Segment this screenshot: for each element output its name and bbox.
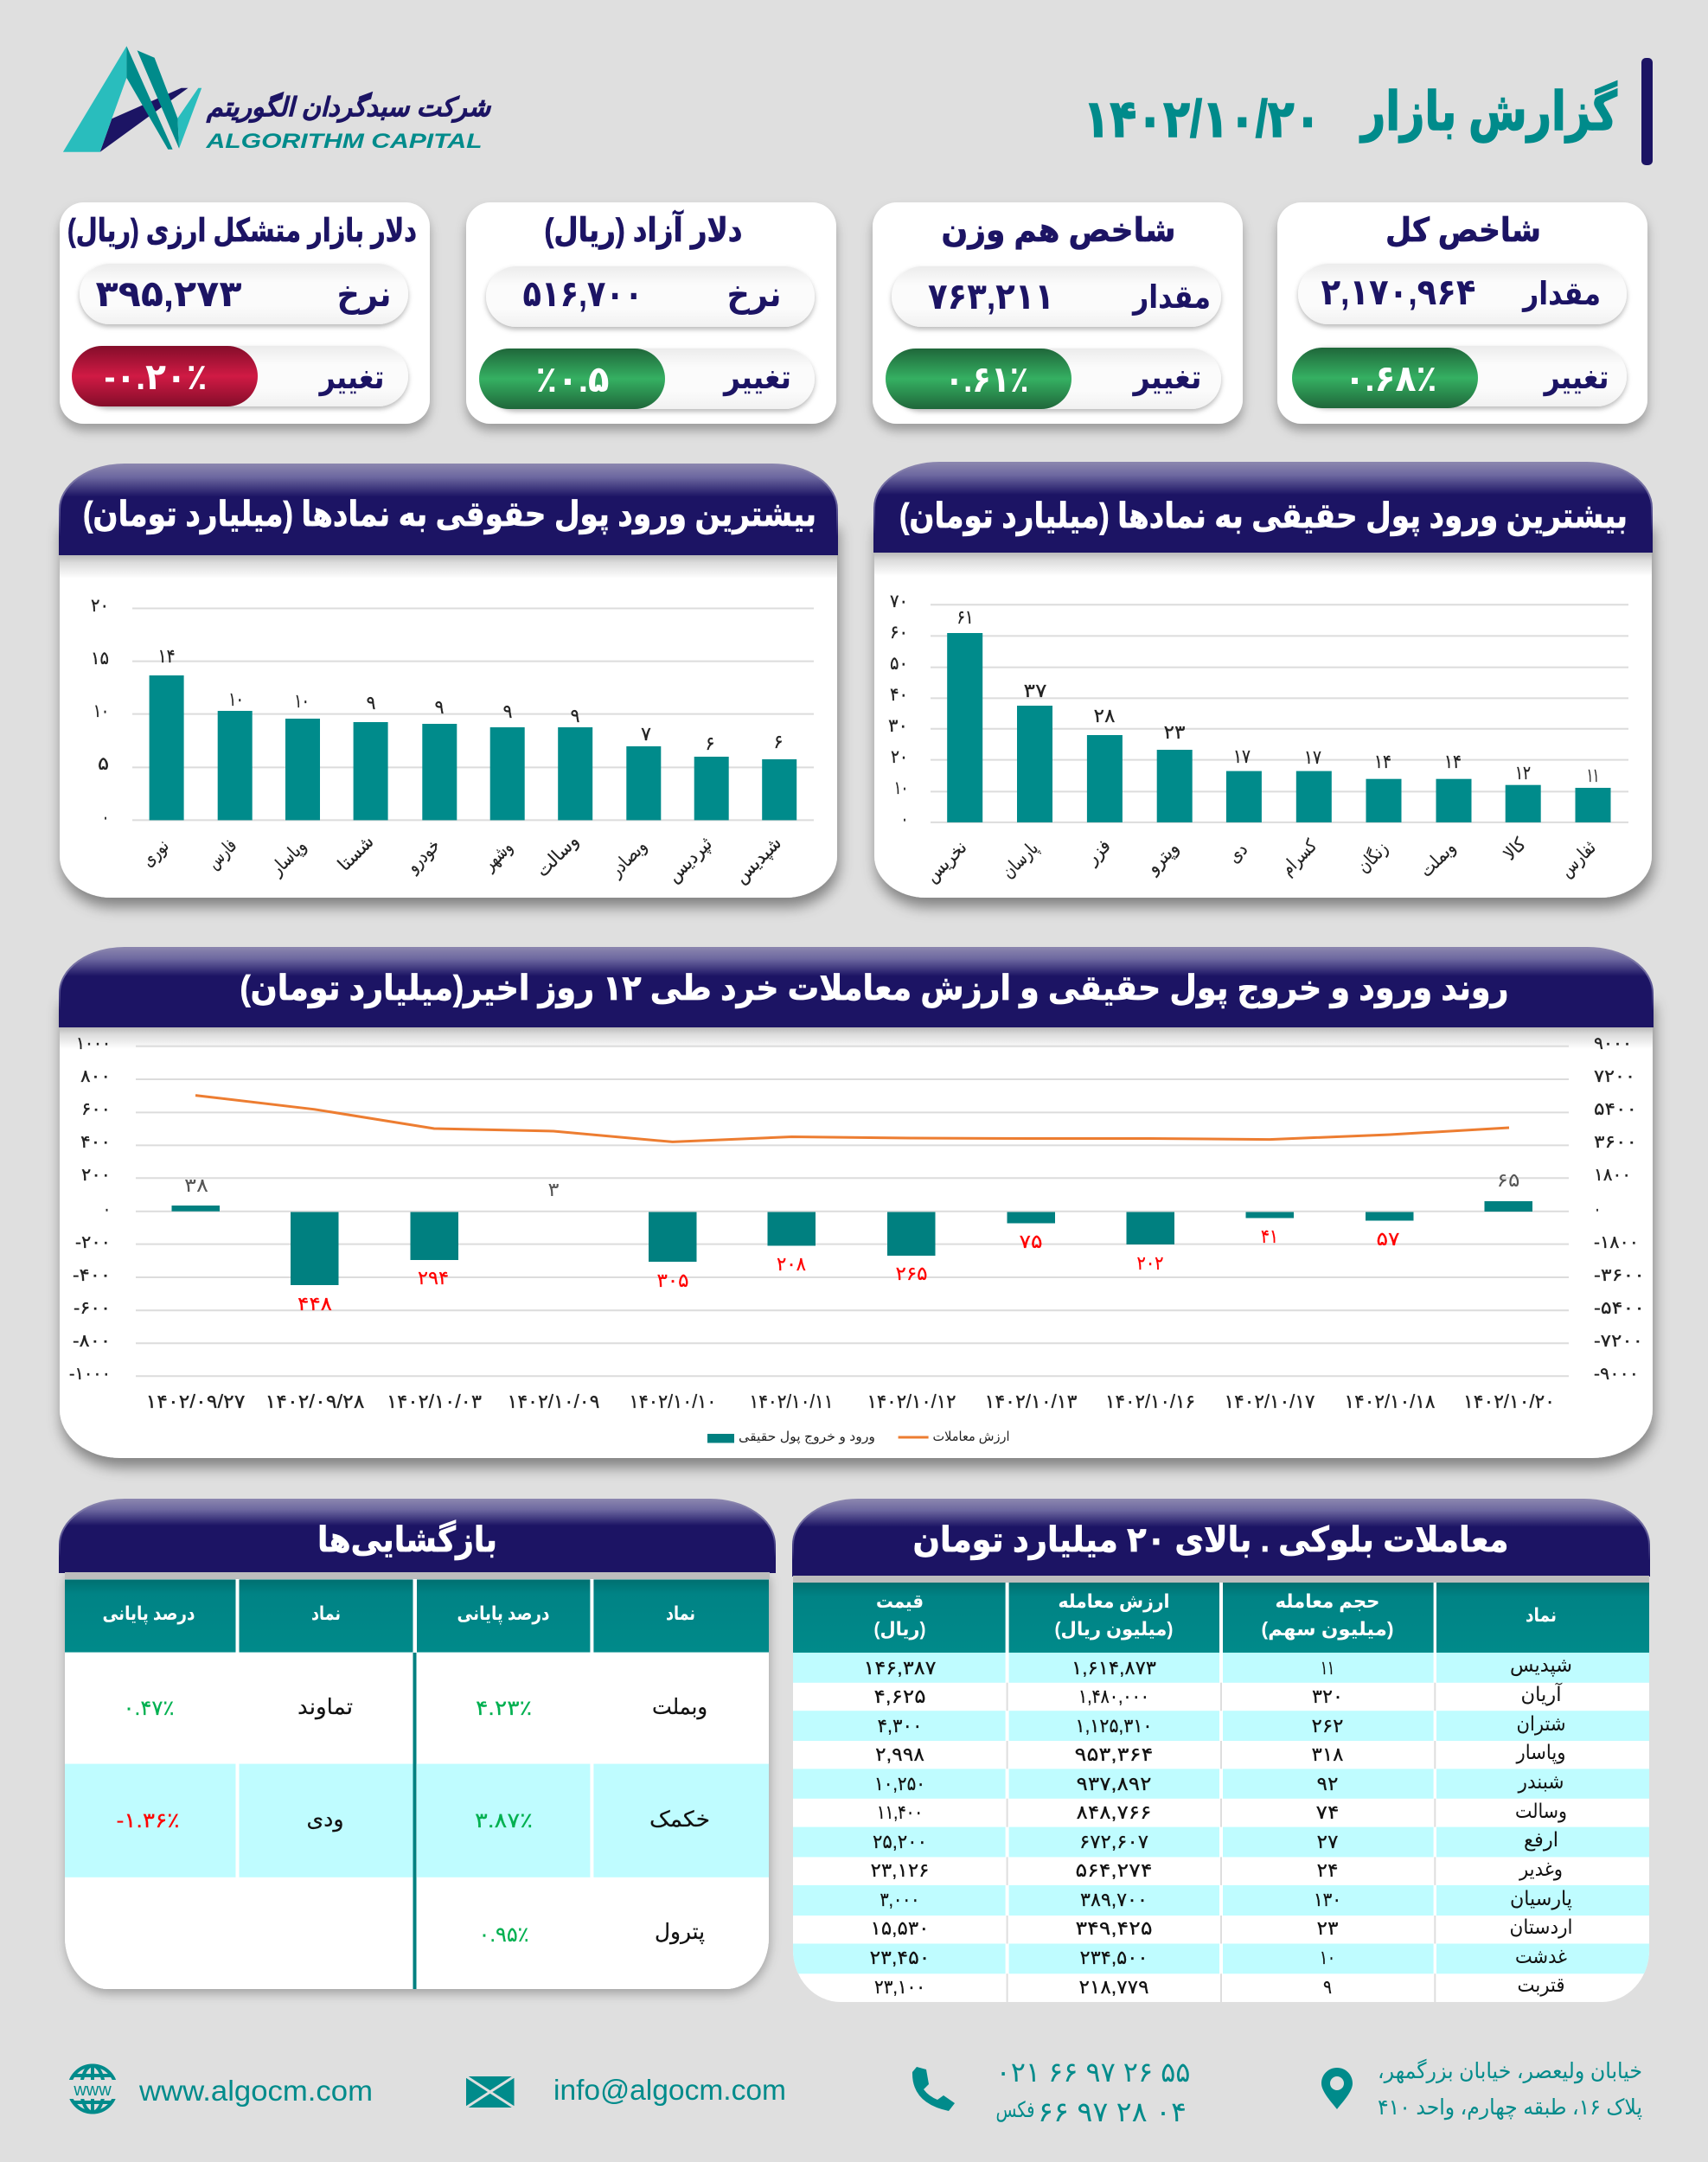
y axis labels: ۳۰	[888, 716, 908, 736]
value labels: ۱۰	[228, 688, 244, 710]
value labels: ۹	[503, 700, 512, 722]
panel: block trades table	[793, 1500, 1649, 2002]
legend: ارزش معاملات	[932, 1430, 1010, 1444]
date axis: ۱۴۰۲/۱۰/۱۱	[749, 1391, 834, 1412]
panel: equal-weight index card	[873, 202, 1243, 424]
rate pill	[80, 264, 408, 324]
value labels: ۶	[706, 732, 714, 754]
y axis labels: ۵	[98, 754, 109, 774]
date axis: ۱۴۰۲/۱۰/۱۷	[1225, 1391, 1315, 1412]
address text: خیابان ولیعصر، خیابان بزرگمهر،	[1378, 2058, 1642, 2084]
value labels: ۹	[571, 705, 579, 726]
panel header	[874, 463, 1652, 552]
flow value labels: ۴۴۸	[297, 1293, 332, 1314]
value labels: ۱۷	[1304, 746, 1321, 768]
flow value labels: ۵۷	[1377, 1228, 1400, 1250]
company name Persian: شرکت سبدگردان الگوریتم	[206, 92, 492, 123]
value labels: ۶	[773, 731, 784, 752]
x axis symbols: کالا	[1500, 835, 1530, 864]
panel header	[60, 464, 837, 554]
left y axis: ۲۰۰	[81, 1166, 111, 1185]
x axis symbols: وپاسار	[266, 836, 310, 880]
row 1: تماوند	[297, 1695, 353, 1720]
panel: free dollar card	[466, 202, 836, 424]
row: parsian: پارسیان	[1510, 1887, 1572, 1910]
row: shepdis	[863, 1653, 1572, 1679]
legend	[707, 1430, 1010, 1445]
right y axis: ۰	[1594, 1200, 1601, 1219]
x axis symbols: وبصادر	[605, 836, 650, 881]
flow value labels	[184, 1169, 1520, 1314]
row: shabandar: ۹۲	[1316, 1773, 1339, 1794]
value labels: ۱۰	[294, 690, 310, 712]
date axis: ۱۴۰۲/۱۰/۱۲	[867, 1391, 956, 1412]
row: vesalat: وسالت	[1515, 1800, 1567, 1823]
flow value labels: ۲۹۴	[418, 1267, 449, 1289]
x axis symbols	[138, 831, 785, 887]
row 1	[123, 1695, 707, 1720]
website address: www.algocm.com	[138, 2075, 373, 2107]
row 3: پترول	[655, 1920, 705, 1945]
table column headings: ارزش معامله	[1059, 1590, 1169, 1612]
value labels: ۲۳	[1164, 721, 1186, 743]
x axis symbols: خودرو	[402, 835, 444, 877]
y axis labels	[888, 592, 908, 829]
company name Latin: ALGORITHM CAPITAL	[205, 130, 482, 153]
logo: Algorithm Capital	[63, 46, 492, 153]
value labels: ۶۱	[956, 606, 974, 628]
table column headings: درصد پایانی	[102, 1602, 195, 1625]
change pill: -۰.۲۰٪	[104, 356, 208, 397]
logo mark	[63, 46, 202, 152]
value labels: ۱۷	[1233, 745, 1251, 767]
panel: total index card	[1277, 202, 1647, 424]
row: ghatorbat: قتربت	[1517, 1973, 1565, 1997]
y axis labels: ۵۰	[890, 654, 908, 674]
change pill: ۰.۶۸٪	[1344, 358, 1437, 399]
flow value labels: ۳	[548, 1179, 560, 1200]
flow value labels: ۲۶۵	[896, 1263, 927, 1284]
change pill: تغییر	[1543, 360, 1609, 396]
row: parsian: ۱۳۰	[1314, 1889, 1341, 1910]
row: ghatorbat: ۲۳,۱۰۰	[874, 1976, 925, 1998]
row: vaghadir: ۲۳,۱۲۶	[870, 1859, 929, 1881]
rate pill: ۵۱۶,۷۰۰	[522, 273, 643, 314]
y axis labels: ۱۵	[91, 649, 109, 668]
change pill	[1292, 346, 1627, 408]
legend: ورود و خروج پول حقیقی	[739, 1430, 875, 1445]
panel header	[60, 948, 1653, 1027]
email address: info@algocm.com	[553, 2074, 786, 2106]
row: vesalat: ۱۱,۴۰۰	[877, 1801, 923, 1823]
row: vepasar: ۹۵۳,۳۶۴	[1074, 1743, 1154, 1765]
x axis symbols: نخریس	[922, 837, 970, 886]
footer: email	[466, 2074, 786, 2108]
date axis: ۱۴۰۲/۰۹/۲۸	[265, 1391, 365, 1412]
x axis symbols: ثپردیس	[663, 834, 716, 886]
row: shabandar: شبندر	[1518, 1770, 1564, 1794]
row 3: ۰.۹۵٪	[479, 1923, 529, 1947]
value labels: ۱۴	[1444, 751, 1462, 772]
change pill	[72, 346, 408, 406]
value labels: ۱۲	[1515, 762, 1531, 784]
left y axis: -۸۰۰	[73, 1332, 111, 1351]
row: ghadasht: ۲۳۴,۵۰۰	[1079, 1947, 1148, 1968]
table column headings: حجم معامله	[1275, 1590, 1380, 1612]
fax number: فکس	[996, 2098, 1034, 2122]
y axis labels: ۴۰	[890, 685, 908, 705]
row: ghadasht: غدشت	[1515, 1945, 1567, 1967]
value pill: ۲,۱۷۰,۹۶۴	[1321, 272, 1475, 312]
row: parsian: ۳,۰۰۰	[880, 1889, 920, 1910]
flow value labels: ۲۰۲	[1136, 1252, 1164, 1274]
y axis labels: ۲۰	[891, 747, 908, 767]
address text: پلاک ۱۶، طبقه چهارم، واحد ۴۱۰	[1378, 2095, 1642, 2120]
icon: phone	[912, 2067, 955, 2111]
x axis symbols: شستا	[335, 832, 378, 875]
row: arian	[873, 1682, 1563, 1707]
row: vepasar	[875, 1741, 1565, 1765]
left y axis: -۴۰۰	[73, 1266, 111, 1285]
right y axis: ۳۶۰۰	[1594, 1133, 1637, 1152]
value pill: مقدار	[1131, 279, 1211, 316]
row: vaghadir: ۵۶۴,۲۷۴	[1076, 1859, 1152, 1881]
icon: globe	[66, 2065, 119, 2113]
row: arfa: ۲۵,۲۰۰	[873, 1831, 927, 1852]
value labels: ۱۴	[1374, 751, 1391, 772]
right y axis	[1594, 1034, 1645, 1384]
row 2: ۳.۸۷٪	[475, 1809, 533, 1833]
left y axis: ۰	[103, 1200, 111, 1219]
panel: 12-day real money trend chart	[60, 948, 1653, 1458]
row: ghadasht: ۱۰	[1320, 1947, 1335, 1968]
table	[65, 1579, 769, 1989]
row: ardestan	[870, 1916, 1572, 1939]
row: ghatorbat: ۲۱۸,۷۷۹	[1079, 1976, 1148, 1998]
row 1: وبملت	[652, 1695, 707, 1720]
table column headings: نماد	[311, 1602, 341, 1624]
x axis symbols: دی	[1224, 840, 1251, 867]
row: ardestan: ۱۵,۵۳۰	[870, 1917, 929, 1939]
bars	[150, 675, 796, 820]
value labels: ۱۱	[1587, 764, 1599, 786]
left y axis: ۱۰۰۰	[76, 1034, 111, 1053]
row: arfa: ارفع	[1524, 1828, 1558, 1852]
footer: website	[66, 2065, 373, 2113]
right y axis: ۵۴۰۰	[1594, 1100, 1637, 1119]
x axis symbols: نوری	[138, 835, 173, 871]
row: vesalat: ۷۴	[1316, 1801, 1339, 1823]
x axis symbols: وشهر	[479, 837, 516, 875]
title text: گزارش بازار	[1359, 80, 1618, 143]
y axis labels: ۲۰	[91, 596, 109, 616]
row: shetran: ۴,۳۰۰	[877, 1715, 922, 1737]
icon: globe: www	[73, 2081, 112, 2100]
row 3	[479, 1920, 705, 1947]
y axis labels: ۷۰	[890, 592, 908, 611]
x axis symbols: پارسان	[998, 838, 1042, 882]
table column headings: نماد	[1526, 1604, 1557, 1626]
date axis: ۱۴۰۲/۱۰/۱۳	[984, 1391, 1078, 1412]
flow value labels: ۲۰۸	[777, 1253, 806, 1275]
row: arian: ۴,۶۲۵	[873, 1685, 925, 1707]
rate pill: ۳۹۵,۲۷۳	[95, 273, 242, 314]
left y axis: ۴۰۰	[80, 1133, 111, 1152]
row: shetran: شتران	[1517, 1712, 1565, 1736]
panel header	[60, 1500, 775, 1572]
table column headings	[873, 1590, 1557, 1641]
y axis labels: ۱۰	[93, 701, 109, 721]
row: ardestan: ۲۳	[1316, 1917, 1339, 1939]
row: arfa: ۶۷۲,۶۰۷	[1079, 1831, 1148, 1852]
table column headings: (میلیون سهم)	[1261, 1618, 1394, 1641]
row: vepasar: ۲,۹۹۸	[875, 1743, 924, 1765]
rate pill: نرخ	[337, 276, 391, 315]
row: shabandar: ۱۰,۲۵۰	[874, 1773, 925, 1794]
date axis	[145, 1391, 1555, 1412]
value labels: ۳۷	[1024, 680, 1047, 701]
rate pill: نرخ	[726, 276, 782, 315]
panel: reopening symbols table	[60, 1500, 775, 1989]
panel header: معاملات بلوکی . بالای ۲۰ میلیارد تومان	[913, 1521, 1508, 1560]
row: arian: ۱,۴۸۰,۰۰۰	[1078, 1685, 1149, 1707]
right y axis: -۳۶۰۰	[1594, 1266, 1645, 1285]
row 2: ودی	[306, 1807, 344, 1833]
y axis labels: ۰	[102, 808, 109, 828]
panel: legal money inflow chart	[60, 464, 837, 898]
change pill	[479, 349, 815, 409]
y axis labels	[91, 596, 109, 828]
right y axis: ۹۰۰۰	[1594, 1034, 1632, 1053]
row: vaghadir: وغدیر	[1519, 1858, 1563, 1881]
left y axis	[69, 1034, 111, 1384]
table column headings: (ریال)	[873, 1618, 925, 1640]
fax number: ۶۶ ۹۷ ۲۸ ۰۴	[1038, 2096, 1187, 2127]
x axis symbols: ثفارس	[1557, 837, 1600, 881]
date axis: ۱۴۰۲/۱۰/۰۳	[387, 1391, 482, 1412]
row: shepdis: ۱۱	[1321, 1657, 1334, 1679]
date axis: ۱۴۰۲/۱۰/۱۸	[1344, 1391, 1436, 1412]
panel header: بازگشایی‌ها	[317, 1519, 497, 1560]
panel header	[793, 1500, 1649, 1576]
value labels: ۹	[367, 692, 375, 713]
card heading: دلار آزاد (ریال)	[545, 209, 742, 249]
value pill	[892, 266, 1221, 327]
change pill	[886, 349, 1221, 409]
x axis symbols	[922, 835, 1600, 886]
right y axis: -۵۴۰۰	[1594, 1299, 1645, 1318]
report date: ۱۴۰۲/۱۰/۲۰	[1083, 90, 1321, 148]
row: arian: ۳۲۰	[1312, 1685, 1343, 1707]
x axis symbols: شپدیس	[731, 833, 785, 887]
row: shepdis: ۱۴۶,۳۸۷	[863, 1657, 937, 1679]
bars	[947, 633, 1610, 822]
accent bar	[1641, 58, 1653, 165]
value labels	[158, 645, 784, 754]
x axis symbols: کسرام	[1277, 836, 1321, 880]
panel header: روند ورود و خروج پول حقیقی و ارزش معاملات خرد طی ۱۲ روز اخیر(میلیارد تومان)	[240, 969, 1508, 1008]
left y axis: -۶۰۰	[74, 1299, 111, 1318]
flow value labels: ۳۸	[184, 1174, 208, 1196]
row 2: خکمک	[649, 1807, 710, 1832]
value pill: مقدار	[1521, 276, 1601, 312]
panel header: بیشترین ورود پول حقوقی به نمادها (میلیارد تومان)	[83, 496, 816, 534]
row: vesalat	[877, 1800, 1567, 1823]
flow bars	[171, 1201, 1532, 1285]
date axis: ۱۴۰۲/۰۹/۲۷	[145, 1391, 246, 1412]
card heading: شاخص کل	[1385, 213, 1541, 249]
row: arian: آریان	[1520, 1682, 1563, 1706]
row: shepdis: ۱,۶۱۴,۸۷۳	[1071, 1657, 1156, 1679]
row: parsian	[880, 1887, 1572, 1910]
date axis: ۱۴۰۲/۱۰/۱۰	[630, 1391, 716, 1412]
row: vepasar: ۳۱۸	[1311, 1743, 1344, 1765]
value labels: ۱۴	[158, 645, 176, 667]
row: vaghadir: ۲۴	[1316, 1859, 1339, 1881]
left y axis: -۲۰۰	[75, 1233, 111, 1252]
phone number: ۰۲۱ ۶۶ ۹۷ ۲۶ ۵۵	[996, 2056, 1190, 2088]
row: ghatorbat	[874, 1973, 1565, 1998]
table column headings: درصد پایانی	[457, 1602, 550, 1625]
value labels: ۷	[641, 723, 651, 745]
row: vesalat: ۸۴۸,۷۶۶	[1076, 1801, 1152, 1823]
x axis symbols: فارس	[203, 835, 240, 873]
right y axis: ۷۲۰۰	[1594, 1067, 1635, 1086]
row: shetran: ۲۶۲	[1311, 1715, 1344, 1737]
row: vaghadir	[870, 1858, 1563, 1881]
flow value labels: ۳۰۵	[657, 1270, 688, 1291]
row 1: ۴.۲۳٪	[476, 1697, 532, 1720]
y axis labels: ۶۰	[890, 623, 908, 643]
icon: envelope	[466, 2076, 514, 2108]
value labels: ۲۸	[1093, 705, 1116, 726]
change pill: تغییر	[1132, 360, 1202, 396]
right y axis: -۹۰۰۰	[1594, 1365, 1639, 1384]
row: arfa	[873, 1828, 1558, 1852]
right y axis: -۷۲۰۰	[1594, 1332, 1643, 1351]
y axis labels: ۰	[901, 809, 908, 829]
header: report title	[1083, 58, 1653, 165]
left y axis: ۸۰۰	[80, 1067, 111, 1086]
x axis symbols: وسالت	[533, 831, 583, 881]
table column headings: (میلیون ریال)	[1055, 1618, 1173, 1641]
rate pill	[486, 266, 815, 327]
change pill: ۰.۶۱٪	[944, 359, 1029, 400]
change pill: تغییر	[318, 360, 384, 396]
row: shabandar	[874, 1770, 1564, 1794]
x axis symbols: وپترو	[1142, 838, 1183, 878]
change pill: ٪۰.۵	[536, 359, 609, 400]
row: ghatorbat: ۹	[1323, 1976, 1332, 1998]
row 2	[116, 1807, 710, 1833]
card heading: دلار بازار متشکل ارزی (ریال)	[67, 213, 417, 249]
flow value labels: ۷۵	[1019, 1231, 1043, 1252]
y axis labels: ۱۰	[894, 778, 908, 798]
value labels	[956, 606, 1599, 786]
value pill	[1298, 264, 1627, 324]
value pill: ۷۶۳,۲۱۱	[928, 276, 1054, 317]
row 1: ۰.۴۷٪	[123, 1697, 175, 1720]
table	[793, 1583, 1649, 2002]
x axis symbols: فزر	[1082, 836, 1115, 869]
table column headings: نماد	[666, 1602, 695, 1624]
row: vepasar: وپاسار	[1516, 1741, 1565, 1764]
row: ghadasht: ۲۳,۴۵۰	[870, 1947, 931, 1968]
value labels: ۹	[434, 696, 445, 718]
date axis: ۱۴۰۲/۱۰/۲۰	[1463, 1391, 1555, 1412]
date axis: ۱۴۰۲/۱۰/۰۹	[507, 1391, 600, 1412]
row: arfa: ۲۷	[1316, 1831, 1339, 1852]
table column headings	[102, 1602, 695, 1625]
row: shetran	[877, 1712, 1565, 1737]
left y axis: -۱۰۰۰	[69, 1365, 111, 1384]
footer: phone	[912, 2056, 1190, 2127]
row: shabandar: ۹۳۷,۸۹۲	[1076, 1773, 1152, 1794]
footer: address	[1321, 2058, 1642, 2120]
card heading: شاخص هم وزن	[941, 213, 1176, 250]
table column headings: قیمت	[876, 1590, 924, 1612]
x axis symbols: زنگان	[1353, 838, 1392, 877]
row: ghadasht	[870, 1945, 1567, 1968]
row: ardestan: ۳۴۹,۴۲۵	[1076, 1917, 1152, 1939]
address text	[1378, 2058, 1642, 2120]
flow value labels: ۴۱	[1261, 1225, 1278, 1247]
flow value labels: ۶۵	[1496, 1169, 1520, 1191]
right y axis: -۱۸۰۰	[1594, 1233, 1639, 1252]
left y axis: ۶۰۰	[81, 1100, 111, 1119]
right y axis: ۱۸۰۰	[1594, 1166, 1631, 1185]
date axis: ۱۴۰۲/۱۰/۱۶	[1105, 1391, 1195, 1412]
panel: real money inflow chart	[874, 463, 1652, 898]
row: shepdis: شپدیس	[1510, 1653, 1572, 1677]
row: ardestan: اردستان	[1510, 1916, 1572, 1939]
trading value line	[195, 1096, 1509, 1142]
row: parsian: ۳۸۹,۷۰۰	[1080, 1889, 1148, 1910]
row: shetran: ۱,۱۲۵,۳۱۰	[1076, 1715, 1152, 1737]
panel: organized FX market dollar card	[60, 202, 430, 424]
change pill: تغییر	[722, 360, 791, 396]
row 2: -۱.۳۶٪	[116, 1809, 180, 1833]
x axis symbols: وبملت	[1417, 838, 1460, 881]
icon: location pin	[1321, 2068, 1353, 2109]
